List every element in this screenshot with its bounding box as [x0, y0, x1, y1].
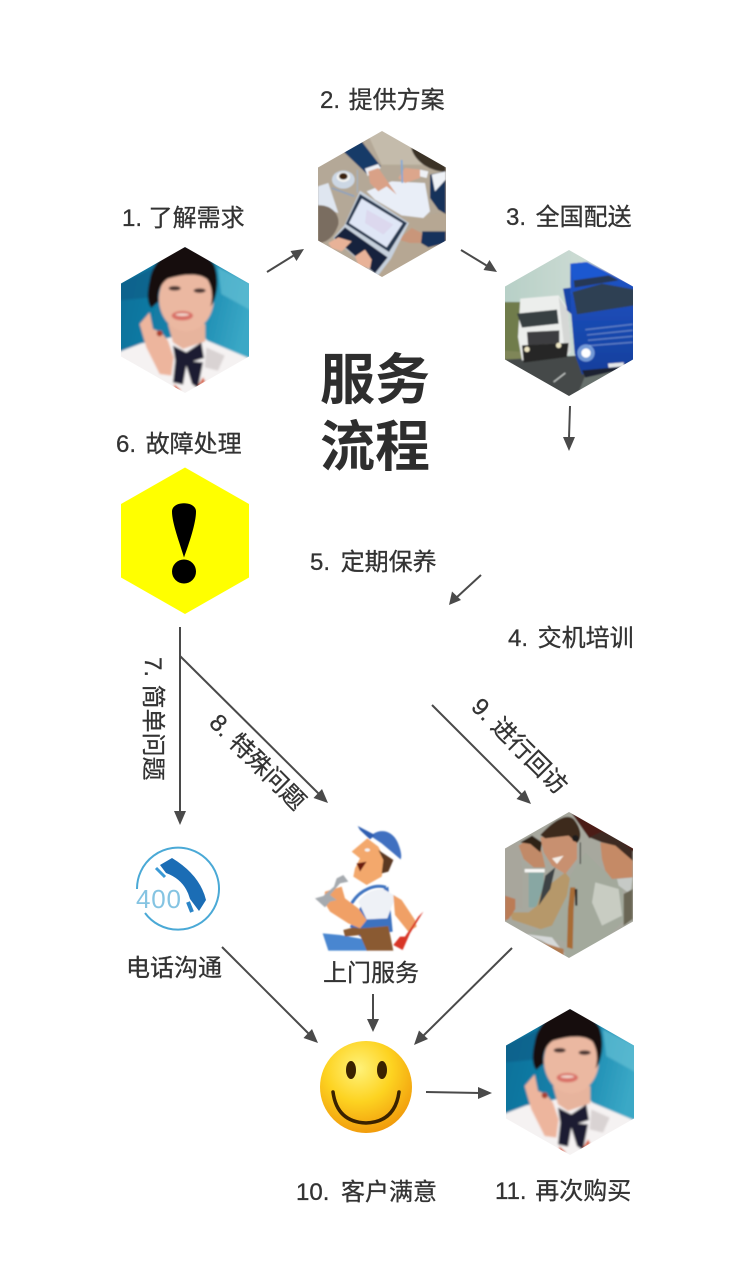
step 1 photo: customer service agent	[118, 244, 255, 397]
icon: repair worker	[315, 826, 423, 951]
arrow: step 1 to step 2	[267, 249, 304, 272]
title: 服务流程: 服务	[320, 349, 430, 411]
title: 服务流程: 流程	[320, 416, 430, 478]
arrow: step 3 to step 4	[563, 406, 575, 451]
icon: 400 telephone: 400	[136, 884, 182, 914]
step 1 label: 1. 了解需求	[122, 205, 245, 232]
step 9 label (rotated): 9. 进行回访	[466, 693, 572, 800]
step 3 photo: delivery trucks	[505, 250, 633, 396]
step 8 label (rotated): 8. 特殊问题	[204, 709, 310, 816]
step 2 photo: business meeting with laptop	[318, 131, 446, 277]
icon: 400 telephone	[136, 848, 219, 930]
step 11 photo: customer service agent	[503, 1006, 640, 1159]
arrow: to on-site service	[180, 656, 328, 803]
label: phone contact: 电话沟通	[126, 955, 222, 982]
arrow: to phone contact	[174, 627, 186, 825]
arrow: to follow-up visit	[432, 705, 531, 804]
service process infographic	[117, 87, 634, 1203]
step 6 icon: warning hexagon	[121, 468, 249, 614]
wrench	[315, 875, 348, 907]
arrow: phone contact to satisfied	[222, 947, 318, 1043]
strap	[352, 886, 386, 903]
step 3 label: 3. 全国配送	[506, 204, 632, 231]
cap	[372, 831, 401, 859]
title: 服务流程	[320, 349, 430, 478]
step 9 photo: call-centre team	[505, 812, 633, 958]
step 2 label: 2. 提供方案	[320, 87, 445, 114]
toolbox	[323, 933, 368, 951]
belt and trousers	[343, 926, 393, 951]
icon: smiley face	[320, 1041, 412, 1133]
arrow: on-site service to satisfied	[367, 994, 379, 1032]
step 4 label: 4. 交机培训	[508, 625, 634, 652]
pipe wrench	[393, 912, 423, 950]
t-shirt	[358, 889, 397, 919]
step 7 label (rotated): 7. 简单问题	[139, 657, 166, 781]
arrow: satisfied to repurchase	[426, 1087, 492, 1099]
step 10 label: 10. 客户满意	[296, 1179, 437, 1206]
label: on-site service: 上门服务	[323, 960, 419, 987]
exclamation mark	[172, 503, 196, 584]
face	[352, 838, 385, 885]
left arm	[324, 887, 367, 928]
step 6 label: 6. 故障处理	[116, 431, 242, 458]
step 11 label: 11. 再次购买	[495, 1178, 631, 1205]
arrow: follow-up visit to satisfied	[414, 948, 512, 1045]
right arm	[393, 895, 417, 932]
step 5 label: 5. 定期保养	[310, 549, 437, 576]
arrow: step 4 to step 5	[449, 575, 481, 605]
overalls	[350, 887, 393, 937]
arrow: step 2 to step 3	[461, 250, 497, 272]
